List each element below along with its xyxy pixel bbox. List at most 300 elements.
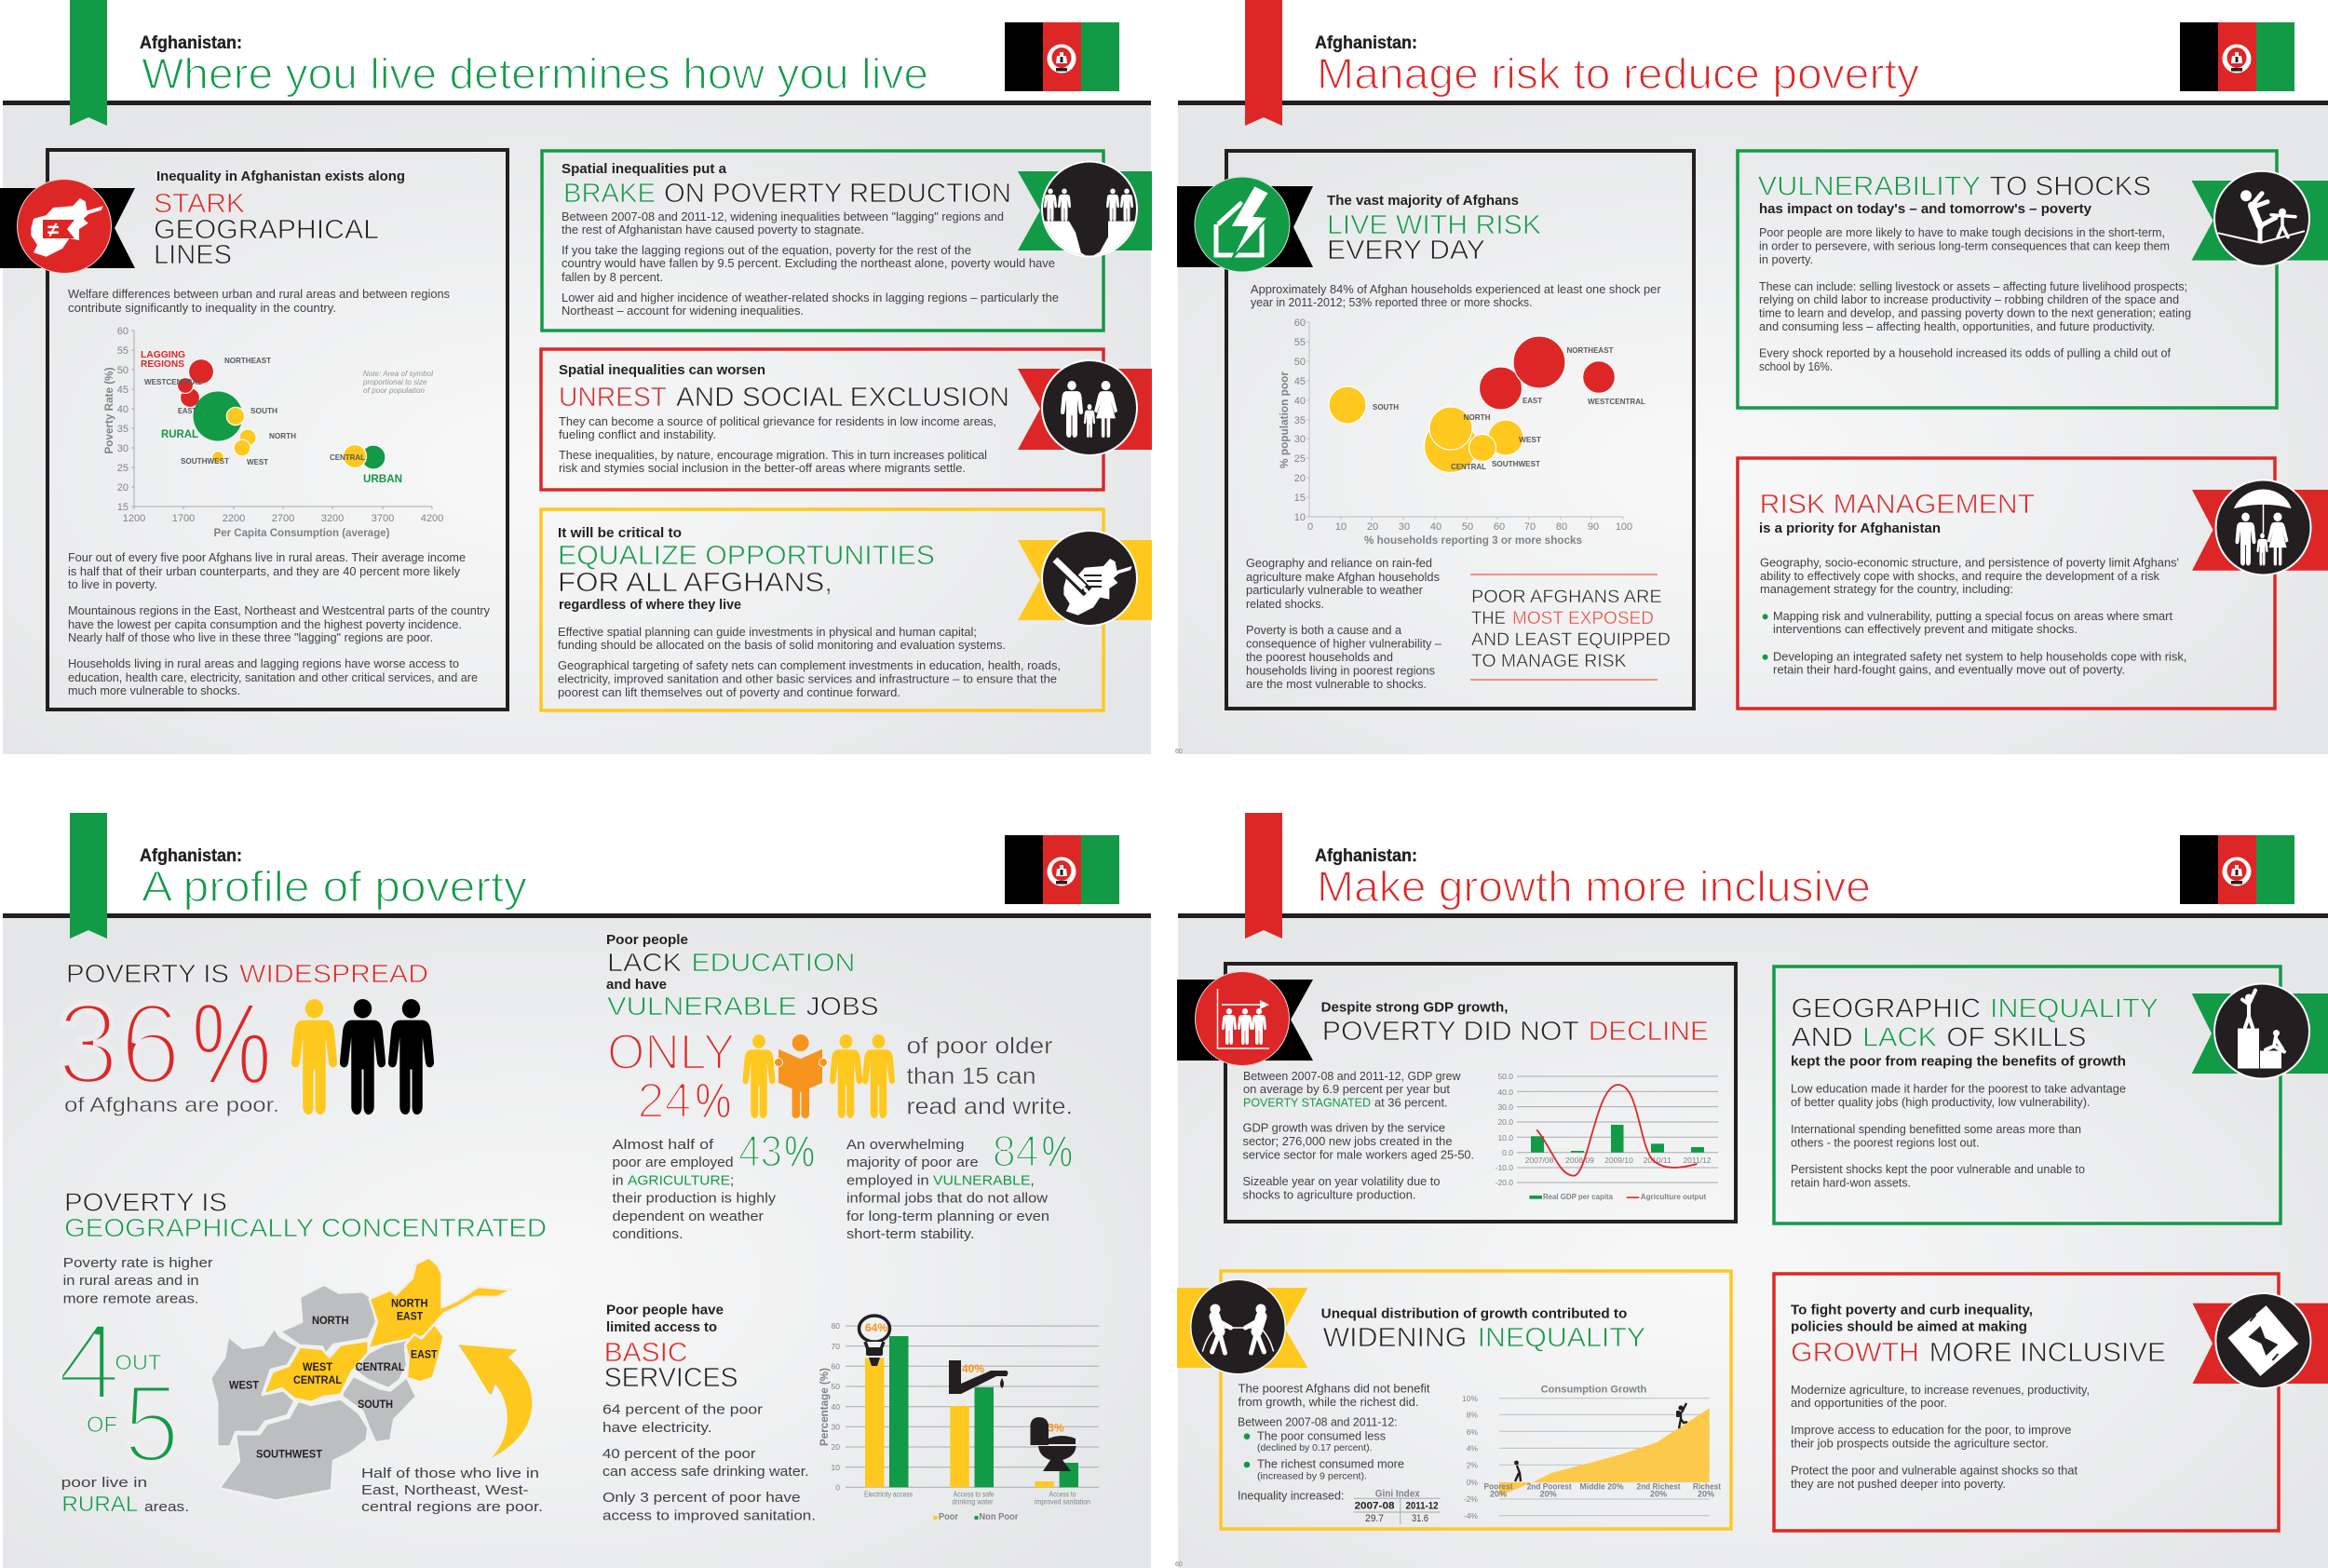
heading: stark geographical lines: Inequality in Afghanistan exists along [156, 169, 405, 184]
stat: 36 percent: % [192, 980, 272, 1109]
text: poor live in rural areas: RURAL [61, 1492, 138, 1516]
icon: house struck by lightning [1177, 177, 1313, 272]
chart: access to basic services: improved sanitation [1035, 1497, 1090, 1507]
chart: population poor vs shocks: 30 [1399, 521, 1410, 533]
text: growth distribution: Inequality increased: [1238, 1489, 1344, 1503]
icon: tug of war [1177, 1279, 1307, 1374]
heading: unrest: Spatial inequalities can worsen [559, 362, 765, 378]
heading: geographic inequality: AND [1792, 1022, 1853, 1052]
icon: planning pen over map [1018, 530, 1152, 627]
text: skills body [1791, 1082, 2126, 1190]
chart: population poor vs shocks: WEST [1519, 435, 1542, 444]
text: vulnerability body: time to learn and develop, and passing poverty down to the next generation; eating [1759, 305, 2191, 319]
chart: population poor vs shocks: 30 [1294, 434, 1306, 445]
icon: figure knocked on a tightrope [2192, 170, 2328, 267]
text: poor live in rural areas: poor live in [61, 1475, 147, 1491]
icon: climbing figure [1676, 1403, 1687, 1428]
chart: poverty rate vs per capita consumption [102, 326, 443, 539]
text: growth distribution: The poor consumed less [1257, 1428, 1386, 1442]
text: GDP growth: service sector for male workers aged 25-50. [1242, 1148, 1474, 1162]
text: risk management body: interventions can effectively prevent and mitigate shocks. [1773, 622, 2078, 636]
stat: 84 percent: 84 [993, 1127, 1039, 1176]
chart: access to basic services: Electricity access [864, 1490, 913, 1499]
text: half of those in lagging regions: central regions are poor. [361, 1499, 543, 1515]
chart: population poor vs shocks: 100 [1616, 521, 1632, 533]
text: vulnerable jobs: short-term stability. [846, 1226, 974, 1242]
chart: consumption growth: Poorest [1484, 1481, 1512, 1491]
chart: GDP and agriculture output: 2011/12 [1683, 1156, 1712, 1165]
heading: basic services: Poor people have [606, 1303, 724, 1318]
chart: GDP and agriculture output: 30.0 [1497, 1102, 1513, 1112]
chart: population poor vs shocks: % households reporting 3 or more shocks [1364, 534, 1582, 547]
heading: widening inequality: Unequal distribution of growth contributed to [1321, 1306, 1627, 1322]
chart: population poor vs shocks: 25 [1294, 453, 1306, 465]
chart: population poor vs shocks: 70 [1524, 521, 1536, 533]
heading: growth more inclusive [1791, 1302, 2166, 1368]
text: poor live in rural areas: areas. [144, 1499, 189, 1515]
panel: vulnerability to shocks [1738, 151, 2328, 408]
heading: stark geographical lines: GEOGRAPHICAL [154, 215, 379, 245]
chart: access to basic services: 50 [832, 1382, 840, 1391]
section: education and jobs [606, 932, 1073, 1242]
text: risk management body: ability to effectively cope with shocks, and require the development of a risk [1760, 569, 2159, 583]
map: regions of Afghanistan: SOUTHWEST [256, 1450, 322, 1461]
text: GDP growth [1242, 1069, 1474, 1202]
chart: population poor vs shocks: EAST [1523, 396, 1543, 405]
chart: poverty rate vs per capita consumption: NORTH [269, 431, 296, 440]
text: poor live in rural areas [61, 1475, 189, 1516]
chart: consumption growth: 6% [1467, 1427, 1478, 1437]
chart: poverty rate vs per capita consumption: CENTRAL [330, 453, 365, 462]
chart: poverty rate vs per capita consumption: 35 [117, 424, 129, 435]
chart: poverty rate vs per capita consumption: 2700 [272, 513, 294, 524]
heading: manage risk: Manage risk to reduce poverty [1317, 49, 1919, 98]
chart: access to basic services: drinking water [952, 1497, 994, 1507]
chart: poverty rate vs per capita consumption: SOUTH [250, 406, 277, 415]
text: vulnerable jobs: An overwhelming [846, 1137, 965, 1153]
heading: geographic inequality [1791, 994, 2159, 1070]
heading: lack education vulnerable jobs: JOBS [806, 992, 879, 1021]
heading: geographic inequality: OF SKILLS [1946, 1022, 2086, 1052]
chart: poverty rate vs per capita consumption: LAGGING [141, 349, 185, 360]
icon: light bulb: 64% [865, 1321, 887, 1334]
heading: poverty did not decline: DECLINE [1589, 1017, 1709, 1047]
heading: poverty did not decline [1321, 1000, 1709, 1047]
text: skills body: of better quality jobs (high productivity, low vulnerability). [1791, 1095, 2091, 1109]
stat: 36 percent: 36 [57, 980, 182, 1109]
chart: consumption growth: 20% [1698, 1490, 1714, 1499]
text: brake body: the rest of Afghanistan have caused poverty to stagnate. [562, 223, 864, 237]
chart: consumption growth: 20% [1540, 1490, 1557, 1499]
heading: equalize opportunities: EQUALIZE OPPORTUNITIES [558, 541, 935, 571]
chart: poverty rate vs per capita consumption: 1700 [172, 513, 195, 524]
chart: population poor vs shocks: NORTH [1464, 412, 1490, 422]
text: access figures [602, 1402, 816, 1524]
icon: one in three people [291, 999, 434, 1115]
text: rural and regional inequality: is half that of their urban counterparts, and they are 40 percent more likely [68, 564, 460, 578]
map: regions of Afghanistan: EAST [397, 1311, 423, 1322]
text: rural and remote: in rural areas and in [63, 1273, 199, 1289]
chart: poverty rate vs per capita consumption: WEST [247, 457, 269, 466]
text: risk management body: Developing an integrated safety net system to help households cope with risk, [1773, 649, 2186, 663]
chart: poverty rate vs per capita consumption: 4200 [421, 513, 443, 524]
chart: population poor vs shocks: 55 [1294, 337, 1306, 348]
chart: access to basic services: 30 [832, 1423, 840, 1432]
icon: clasped hands [2192, 1292, 2328, 1389]
heading: risk management: RISK MANAGEMENT [1760, 490, 2035, 520]
text: GDP growth: GDP growth was driven by the service [1242, 1121, 1445, 1135]
stat: 43 percent: % [784, 1127, 815, 1176]
text: rural and remote: Poverty rate is higher [63, 1255, 213, 1271]
chart: poverty rate vs per capita consumption: REGIONS [141, 358, 184, 370]
heading: basic services: SERVICES [604, 1363, 738, 1393]
text: unrest body: fueling conflict and instability. [559, 427, 716, 441]
callout: poor Afghans most exposed: TO MANAGE RISK [1471, 651, 1626, 671]
stat: 84 percent [993, 1127, 1073, 1176]
chart: consumption growth: 2nd Poorest [1527, 1481, 1572, 1491]
icon: figures on uneven pedestals [2192, 983, 2328, 1080]
map: regions of Afghanistan [210, 1258, 512, 1501]
text: risk management body: management strategy for the country, including: [1760, 582, 2013, 596]
icon: toilet: 3% [1048, 1422, 1064, 1435]
icon: inequality map badge [0, 179, 135, 274]
heading: widening inequality [1321, 1306, 1645, 1353]
callout: poor Afghans most exposed: MOST EXPOSED [1512, 608, 1654, 629]
heading: geographic inequality: kept the poor from reaping the benefits of growth [1791, 1054, 2126, 1070]
heading: geographically concentrated: GEOGRAPHICALLY CONCENTRATED [64, 1213, 547, 1242]
chart: population poor vs shocks: 90 [1588, 521, 1599, 533]
text: household shocks: Approximately 84% of Afghan households experienced at least one shock per [1251, 282, 1661, 296]
stat: only 24 percent [607, 1024, 736, 1129]
heading: geographic inequality: INEQUALITY [1990, 994, 2159, 1023]
text: rural and remote: more remote areas. [63, 1291, 199, 1307]
chart: GDP and agriculture output: Agriculture output [1641, 1192, 1706, 1201]
icon: light bulb [859, 1316, 890, 1366]
heading: poverty did not decline: Despite strong GDP growth, [1321, 1000, 1508, 1016]
heading: unrest: UNREST [559, 383, 667, 412]
text: rural and regional inequality: Four out of every five poor Afghans live in rural areas. Their average income [68, 550, 466, 564]
map: regions of Afghanistan: NORTH [391, 1299, 428, 1310]
stat: 4 out of 5 [57, 1301, 180, 1486]
panel: unrest and social exclusion [541, 349, 1152, 490]
stat: 84 percent: % [1042, 1127, 1073, 1176]
heading: vulnerability to shocks: TO SHOCKS [1990, 171, 2151, 201]
stat: 4 out of 5: OF [87, 1413, 117, 1438]
chart: population poor vs shocks: 60 [1294, 318, 1306, 329]
chart: consumption growth: 20% [1490, 1490, 1507, 1499]
heading: lack education vulnerable jobs: EDUCATION [691, 948, 855, 977]
panel: make growth more inclusive [1175, 813, 2328, 1568]
chart: population poor vs shocks [1278, 318, 1645, 547]
text: access figures: have electricity. [602, 1420, 711, 1436]
text: brake body [562, 210, 1059, 318]
text: rural and regional inequality: Households living in rural areas and lagging regions have worse access to [68, 656, 459, 670]
text: inclusive growth body: and opportunities of the poor. [1791, 1396, 1947, 1410]
chart: poverty rate vs per capita consumption: 2200 [223, 513, 245, 524]
text: inclusive growth body: Improve access to education for the poor, to improve [1791, 1423, 2071, 1437]
chart: consumption growth: 4% [1467, 1443, 1478, 1453]
chart: population poor vs shocks: 45 [1294, 376, 1306, 387]
icon: walking figure [1514, 1461, 1521, 1481]
chart: population poor vs shocks: 40 [1294, 396, 1306, 407]
chart: GDP and agriculture output: -10.0 [1496, 1163, 1513, 1172]
map: regions of Afghanistan: NORTH [312, 1316, 348, 1327]
chart: GDP and agriculture output: 2010/11 [1644, 1156, 1672, 1165]
text: access figures: Only 3 percent of poor have [602, 1490, 801, 1506]
text: rural and regional inequality [68, 550, 490, 697]
chart: population poor vs shocks: WESTCENTRAL [1588, 397, 1645, 406]
section: poverty is widespread [57, 959, 434, 1116]
callout: poor Afghans most exposed: POOR AFGHANS ARE [1471, 587, 1662, 607]
chart: access to basic services: 80 [832, 1321, 840, 1331]
chart: poverty rate vs per capita consumption: of poor population [363, 386, 426, 395]
text: equalize body: electricity, improved sanitation and other basic services and infrastructure – to ensure that the [558, 672, 1057, 685]
heading: poverty is widespread: POVERTY IS [66, 959, 229, 988]
chart: access to basic services: 0 [835, 1482, 840, 1492]
text: vulnerable jobs: majority of poor are [846, 1155, 979, 1170]
chart: GDP and agriculture output: 10.0 [1497, 1133, 1513, 1142]
heading: lack education vulnerable jobs: LACK [607, 948, 682, 977]
text: vulnerability body: school by 16%. [1759, 359, 1833, 373]
chart: population poor vs shocks: 35 [1294, 415, 1306, 426]
text: of poor older than 15: than 15 can [907, 1063, 1035, 1089]
table: Gini index: Gini Index [1375, 1488, 1421, 1499]
chart: consumption growth: -2% [1464, 1494, 1478, 1504]
chart: poverty rate vs per capita consumption: 3200 [321, 513, 344, 524]
icon: Afghan flag [1005, 835, 1119, 904]
text: agriculture employment: their production is highly [613, 1191, 777, 1207]
text: skills body: Low education made it harder for the poorest to take advantage [1791, 1082, 2126, 1096]
text: growth distribution: The richest consumed more [1257, 1457, 1404, 1471]
text: agriculture employment: dependent on weather [613, 1209, 764, 1224]
text: vulnerability body: and consuming less – affecting health, opportunities, and future productivity. [1759, 319, 2155, 333]
panel: manage risk to reduce poverty [1175, 0, 2328, 755]
chart: GDP and agriculture output: 40.0 [1497, 1088, 1513, 1097]
chart: access to basic services: 70 [832, 1342, 840, 1351]
panel: equalize opportunities [541, 509, 1152, 710]
heading: stark geographical lines: STARK [154, 189, 246, 219]
text: vulnerable jobs: informal jobs that do not allow [846, 1191, 1048, 1207]
chart: population poor vs shocks: CENTRAL [1451, 462, 1486, 471]
heading: manage risk: Afghanistan: [1315, 34, 1417, 53]
heading: a profile of poverty: A profile of poverty [142, 862, 527, 911]
stat: 4 out of 5: 4 [57, 1301, 121, 1424]
chart: GDP and agriculture output: 2007/08 [1525, 1156, 1554, 1165]
heading: brake on poverty reduction [562, 161, 1011, 209]
heading: lack education vulnerable jobs [606, 932, 879, 1021]
chart: population poor vs shocks: 20 [1367, 521, 1378, 533]
text: risk management body [1760, 556, 2186, 677]
text: GDP growth: on average by 6.9 percent per year but [1243, 1082, 1450, 1096]
chart: consumption growth: Middle 20% [1579, 1481, 1624, 1491]
chart: poverty rate vs per capita consumption: 1200 [123, 513, 145, 524]
icon: family [1018, 359, 1152, 456]
heading: basic services [604, 1303, 738, 1393]
table: Gini index [1354, 1488, 1441, 1524]
icon: inequality map badge: ≠ [47, 218, 59, 241]
heading: live with risk: The vast majority of Afghans [1327, 193, 1519, 209]
heading: brake on poverty reduction: ON POVERTY REDUCTION [664, 179, 1011, 209]
text: agriculture employment: poor are employed [613, 1155, 734, 1170]
text: brake body: Lower aid and higher incidence of weather-related shocks in lagging regions – particularly the [562, 291, 1059, 304]
text: agriculture employment: in [613, 1172, 624, 1188]
heading: lack education vulnerable jobs: Poor people [606, 932, 688, 948]
heading: poverty did not decline: POVERTY DID NOT [1322, 1017, 1579, 1047]
text: geography and vulnerability: Geography and reliance on rain-fed [1246, 556, 1432, 570]
text: inclusive growth body [1791, 1383, 2090, 1491]
heading: where you live: Where you live determines how you live [142, 49, 928, 98]
stat: 4 out of 5: OUT [115, 1350, 161, 1374]
heading: lack education vulnerable jobs: VULNERABLE [607, 992, 797, 1021]
text: equalize body: Effective spatial planning can guide investments in physical and human capital; [558, 625, 977, 639]
text: of Afghans are poor: of Afghans are poor. [64, 1093, 279, 1116]
chart: poverty rate vs per capita consumption: WESTCENTRAL [144, 377, 202, 386]
text: of poor older than 15 [907, 1034, 1073, 1120]
text: access figures: access to improved sanitation. [602, 1508, 816, 1524]
chart: poverty rate vs per capita consumption: SOUTHWEST [181, 456, 230, 466]
chart: population poor vs shocks: SOUTHWEST [1492, 459, 1541, 468]
chart: access to basic services: 40 [832, 1402, 840, 1412]
heading: equalize opportunities: regardless of where they live [559, 597, 741, 613]
heading: vulnerability to shocks: VULNERABILITY [1758, 171, 1981, 201]
heading: widening inequality: WIDENING [1323, 1323, 1467, 1353]
text: rural and regional inequality: to live in poverty. [68, 577, 157, 591]
text: agriculture employment: Almost half of [613, 1137, 714, 1153]
ribbon: green bookmark [70, 0, 107, 126]
text: rural and regional inequality: much more vulnerable to shocks. [68, 683, 240, 697]
heading: equalize opportunities [558, 525, 935, 613]
heading: stark geographical lines [154, 169, 405, 270]
heading: a profile of poverty: Afghanistan: [140, 846, 242, 866]
heading: live with risk: EVERY DAY [1327, 236, 1485, 265]
heading: unrest: AND SOCIAL EXCLUSION [676, 383, 1009, 412]
heading: poverty is widespread [66, 959, 428, 988]
text: of poor older than 15: read and write. [907, 1094, 1073, 1120]
text: skills body: others - the poorest regions lost out. [1791, 1135, 1980, 1149]
heading: risk management: is a priority for Afghanistan [1759, 520, 1941, 536]
chart: GDP and agriculture output [1496, 1072, 1718, 1201]
chart: population poor vs shocks: 40 [1430, 521, 1441, 533]
heading: growth more inclusive: To fight poverty and curb inequality, [1791, 1302, 2033, 1318]
text: agriculture employment: conditions. [613, 1226, 684, 1242]
heading: risk management [1759, 490, 2035, 536]
map: regions of Afghanistan: SOUTH [358, 1399, 393, 1411]
icon: water tap: 40% [962, 1362, 984, 1375]
text: geography and vulnerability: Poverty is both a cause and a [1246, 623, 1402, 637]
chart: GDP and agriculture output: 0.0 [1502, 1148, 1513, 1157]
text: risk management body: Geography, socio-economic structure, and persistence of poverty limit Afghans' [1760, 556, 2179, 570]
text: geography and vulnerability: agriculture make Afghan households [1246, 570, 1440, 584]
chart: poverty rate vs per capita consumption: RURAL [161, 427, 198, 440]
chart: access to basic services: 20 [832, 1442, 840, 1452]
chart: poverty rate vs per capita consumption: 30 [117, 443, 129, 454]
heading: growth more inclusive: GROWTH [1791, 1338, 1919, 1368]
section: geographically concentrated [57, 1188, 547, 1516]
heading: basic services: limited access to [606, 1319, 717, 1335]
text: GDP growth: shocks to agriculture production. [1242, 1188, 1415, 1202]
section: basic services [602, 1303, 1099, 1524]
heading: a profile of poverty [140, 846, 527, 911]
chart: access to basic services: Poor [939, 1512, 958, 1522]
text: vulnerability body: Poor people are more likely to have to make tough decisions in the short-term, [1759, 225, 2165, 239]
panel: poverty did not decline [1177, 964, 1736, 1222]
heading: live with risk: LIVE WITH RISK [1327, 210, 1542, 240]
heading: poverty is widespread: WIDESPREAD [239, 959, 428, 988]
text: equalize body: funding should be allocated on the basis of solid monitoring and evaluation systems. [558, 638, 1006, 652]
heading: make growth more inclusive: Afghanistan: [1315, 846, 1417, 866]
text: agriculture employment: AGRICULTURE [628, 1172, 730, 1188]
icon: family under umbrella [2192, 479, 2328, 575]
chart: poverty rate vs per capita consumption: 3700 [372, 513, 394, 524]
icon: people across a chasm [1018, 160, 1152, 264]
icon: water tap [949, 1360, 1008, 1394]
text: vulnerable jobs: , [1030, 1172, 1035, 1188]
icon: Afghan flag [1005, 22, 1119, 91]
heading: growth more inclusive: policies should be aimed at making [1791, 1318, 2027, 1335]
heading: stark geographical lines: LINES [154, 240, 232, 270]
text: GDP growth: Sizeable year on year volatility due to [1242, 1174, 1440, 1188]
text: welfare differences: Welfare differences between urban and rural areas and between regions [68, 287, 450, 301]
chart: consumption growth: Richest [1693, 1481, 1721, 1491]
text: GDP growth: Between 2007-08 and 2011-12, GDP grew [1243, 1069, 1461, 1083]
text: inclusive growth body: their job prospects outside the agriculture sector. [1791, 1436, 2049, 1451]
chart: population poor vs shocks: NORTHEAST [1566, 345, 1614, 355]
heading: geographic inequality: LACK [1862, 1022, 1938, 1052]
text: agriculture employment [613, 1137, 777, 1242]
table: Gini index: 29.7 [1365, 1513, 1384, 1524]
callout: poor Afghans most exposed: AND LEAST EQUIPPED [1471, 629, 1671, 650]
text: brake body: Between 2007-08 and 2011-12, widening inequalities between "lagging" regions and [562, 210, 1004, 223]
text: growth distribution: (declined by 0.17 percent). [1257, 1442, 1373, 1453]
stat: only 24 percent: 24 [637, 1074, 691, 1129]
chart: population poor vs shocks: 50 [1294, 357, 1306, 368]
chart: poverty rate vs per capita consumption: Note: Area of symbol [363, 370, 433, 378]
text: rural and remote [63, 1255, 213, 1307]
text: unrest body: They can become a source of political grievance for residents in low income areas, [559, 414, 996, 428]
heading: lack education vulnerable jobs: and have [606, 977, 667, 993]
heading: vulnerability to shocks: has impact on today's – and tomorrow's – poverty [1759, 201, 2092, 217]
text: brake body: country would have fallen by 9.5 percent. Excluding the northeast alone, poverty would have [562, 256, 1055, 270]
text: geography and vulnerability: households living in poorest regions [1246, 663, 1435, 678]
chart: access to basic services: 60 [832, 1361, 840, 1371]
text: brake body: Northeast – account for widening inequalities. [562, 304, 804, 318]
panel: a profile of poverty [3, 813, 1151, 1568]
text: agriculture employment: ; [730, 1172, 734, 1188]
text: geography and vulnerability: are the most vulnerable to shocks. [1246, 677, 1427, 691]
chart: access to basic services: Non Poor [979, 1512, 1018, 1522]
chart: consumption growth: 0% [1467, 1478, 1478, 1487]
ribbon: green bookmark [70, 813, 107, 939]
chart: population poor vs shocks: SOUTH [1373, 402, 1399, 412]
chart: GDP and agriculture output: 2009/10 [1604, 1156, 1633, 1165]
text: household shocks [1251, 282, 1661, 309]
map: regions of Afghanistan: CENTRAL [293, 1375, 342, 1386]
heading: geographically concentrated: POVERTY IS [64, 1188, 227, 1216]
text: equalize body [558, 625, 1061, 699]
heading: vulnerability to shocks [1758, 171, 2151, 217]
chart: population poor vs shocks: 15 [1294, 493, 1306, 504]
text: rural and regional inequality: have the lowest per capita consumption and the highest poverty incidence. [68, 617, 462, 631]
chart: poverty rate vs per capita consumption: Per Capita Consumption (average) [214, 526, 389, 539]
text: rural and regional inequality: Nearly half of those who live in these three "lagging" regions are poor. [68, 630, 433, 644]
chart: poverty rate vs per capita consumption: 25 [117, 463, 129, 474]
text: geography and vulnerability: consequence of higher vulnerability – [1246, 637, 1442, 650]
text: access figures: 64 percent of the poor [602, 1402, 763, 1418]
text: GDP growth: POVERTY STAGNATED [1243, 1096, 1371, 1110]
panel: growth more inclusive [1774, 1274, 2328, 1531]
callout: poor Afghans most exposed: THE [1471, 608, 1506, 629]
chart: poverty rate vs per capita consumption: 60 [117, 326, 129, 337]
